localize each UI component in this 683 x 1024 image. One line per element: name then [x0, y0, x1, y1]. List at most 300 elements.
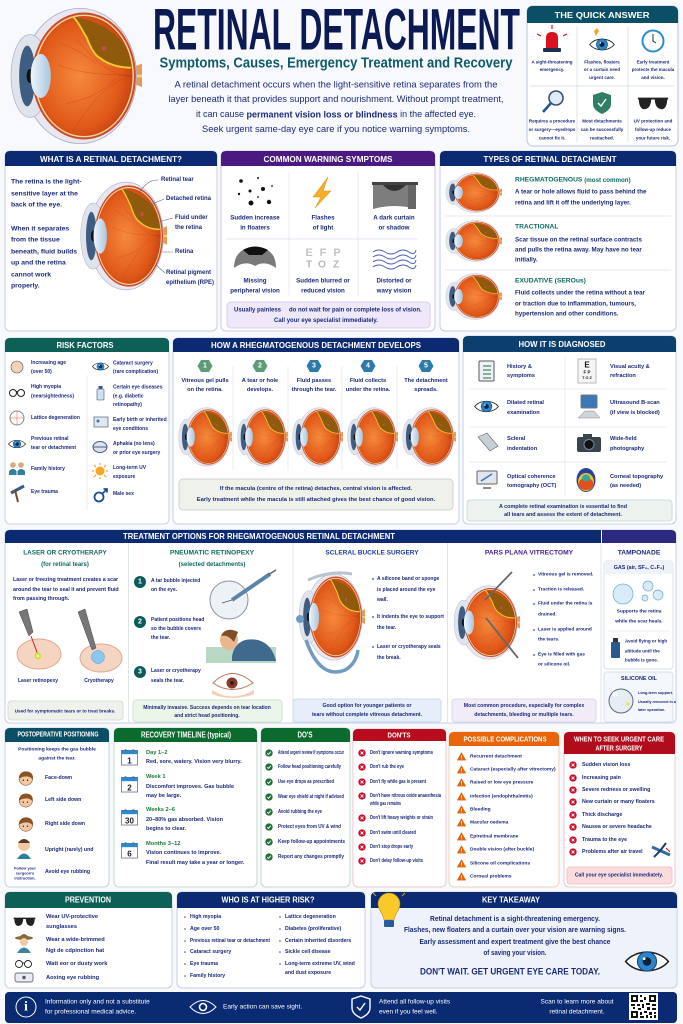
panel: possible complications [449, 732, 559, 887]
diagram: labelled eye: the retina [175, 225, 203, 231]
icon: aeroplane [652, 843, 670, 857]
treatment: pneumatic retinopexy: Patient positions head [151, 617, 204, 623]
treatment: pneumatic retinopexy: 3 [138, 668, 142, 676]
text: risk factors left: Lattice degeneration [31, 415, 80, 421]
step 4: Fluid collects [350, 378, 386, 384]
step 1: on the retina. [187, 387, 223, 393]
icon: siren [537, 25, 567, 52]
text: higher risk list: Sickle cell disease [285, 949, 331, 955]
treatment: scleral buckle surgery: is placed around the eye [377, 587, 436, 593]
step 1 [179, 360, 232, 466]
callout: call specialist: Call your eye specialist immediately. [575, 872, 664, 878]
text: quick answer top row: protects the macula [632, 67, 675, 72]
text: tractional: Scar tissue on the retinal surface contracts [515, 236, 642, 244]
callout: macula: Early treatment while the macula is still attached gives the best chance of good vision. [197, 497, 436, 503]
callout: laser note [8, 701, 123, 720]
treatment: laser or cryotherapy: Cryotherapy [84, 678, 114, 684]
gas box: GAS (air, SF₆, C₃F₈) [614, 565, 664, 571]
treatment: pars plana vitrectomy [452, 550, 596, 722]
treatment: scleral buckle surgery: SCLERAL BUCKLE SURGERY [325, 550, 419, 556]
text: do's list: Use eye drops as prescribed [278, 779, 334, 785]
text: disclaimer: for professional medical advice. [45, 1008, 136, 1016]
panel: prevention: PREVENTION [65, 896, 111, 904]
bullets [184, 916, 281, 977]
step 4: under the retina. [346, 387, 391, 393]
text: complications list: Macular oedema [470, 820, 509, 826]
treatment: pneumatic retinopexy: the tear. [151, 635, 171, 641]
treatment: scleral buckle surgery: the tear. [377, 625, 397, 631]
callout: buckle note: Good option for younger patients or [322, 703, 412, 709]
panel: recovery timeline: RECOVERY TIMELINE (typical) [141, 730, 231, 740]
item: wide-field photography [577, 434, 645, 452]
text: don'ts list: while gas remains [369, 801, 401, 807]
icon: shield check [593, 92, 611, 114]
text: symptoms row one: Sudden increase [230, 214, 280, 222]
text: complications list: Epiretinal membrane [470, 834, 519, 840]
icon: rhegmatogenous eye [446, 172, 502, 213]
text: risk factors right: Aphakia (no lens) [113, 441, 155, 447]
step 2: develops. [247, 387, 274, 393]
item: visual acuity: E [584, 360, 590, 370]
diagram: labelled eye: Retinal pigment [166, 270, 211, 276]
treatment: pneumatic retinopexy: 1 [138, 578, 142, 586]
text: risk factors right: eye conditions [113, 426, 148, 432]
stage: weeks 2-6: 30 [125, 816, 134, 826]
text: complications list: Silicone oil complications [470, 860, 530, 866]
icon: patient face down [206, 630, 276, 663]
text: quick answer bottom row [529, 118, 673, 140]
stage: months 3-12: 6 [127, 850, 132, 858]
text: positioning intro: against the tear. [38, 756, 76, 762]
text: risk factors right: (rare complication) [113, 369, 158, 375]
treatment: tamponade: TAMPONADE [618, 550, 661, 556]
treatment: pars plana vitrectomy: Vitreous gel is removed. [538, 572, 593, 578]
icon: treated eye [212, 674, 254, 698]
panel: who is at higher risk: WHO IS AT HIGHER RISK? [222, 896, 315, 904]
item: scleral indentation [478, 433, 538, 452]
treatment: pars plana vitrectomy: drained. [538, 612, 557, 618]
panel: what is a retinal detachment [5, 151, 217, 331]
step 2 [238, 360, 288, 466]
step 2: 2 [258, 362, 262, 370]
text: don'ts list: Don't rub the eye [370, 764, 404, 770]
text: quick answer bottom row: reattached. [590, 136, 614, 140]
text: higher risk list: Lattice degeneration [285, 914, 336, 920]
stage: week 1: 2 [127, 784, 132, 792]
treatment: scleral buckle surgery: the break. [377, 655, 401, 661]
panel: when to seek urgent care: WHEN TO SEEK URGENT CARE [574, 734, 664, 744]
treatment: tamponade [604, 550, 677, 722]
gas box: bubble is gone. [625, 658, 658, 662]
text: higher risk list: Previous retinal tear or detachment [190, 938, 270, 944]
text: rhegmatogenous: retina and lift it off the underlying layer. [515, 200, 631, 206]
panel: when to seek urgent care [564, 732, 675, 887]
text: symptoms row two: reduced vision [301, 288, 345, 294]
item: dilated retinal examination: examination [507, 410, 540, 416]
text: don'ts list: Don't fly while gas is present [370, 779, 426, 785]
text: takeaway message [404, 915, 626, 957]
text: complications list: Double vision (after buckle) [470, 846, 535, 852]
icons: risk factors left [8, 361, 26, 502]
text: exudative [515, 278, 646, 318]
introduction paragraph: layer beneath it that provides support and nourishment. Without prompt treatment, [168, 94, 504, 105]
item: corneal topography [576, 468, 664, 492]
treatment: pars plana vitrectomy: or silicone oil. [538, 662, 570, 668]
text: quick answer top row [531, 60, 675, 80]
diagram: labelled eye: Retina [175, 249, 194, 255]
icon: eye [626, 952, 668, 971]
panel: how it is diagnosed [463, 336, 676, 524]
text: surgeon instruction: Follow your [14, 866, 36, 870]
text: higher risk list: Age over 50 [190, 926, 220, 932]
icon: eye with instruments [454, 572, 520, 659]
icon: syringe and eyeball [210, 570, 276, 619]
text: quick answer bottom row: follow-up reduce [635, 127, 671, 132]
panel: how it is diagnosed: HOW IT IS DIAGNOSED [518, 339, 606, 349]
panel: what is a retinal detachment: WHAT IS A RETINAL DETACHMENT? [40, 154, 182, 164]
panel: do's: DO'S [298, 730, 312, 740]
text: exudative: or traction due to inflammation, tumours, [515, 300, 636, 308]
text: risk factors left: Family history [31, 466, 65, 472]
text: urgent list: Severe redness or swelling [582, 787, 650, 793]
text: risk factors right: exposure [113, 474, 135, 480]
item: visual acuity: Visual acuity & [610, 364, 650, 370]
text: definition: up and the retina [11, 260, 66, 266]
icon: lightning flash [313, 177, 331, 208]
text: symptoms row two: peripheral vision [230, 288, 280, 294]
text: definition: cannot work [11, 272, 51, 278]
text: prevention list: Ngt de cdpinction hat [46, 948, 104, 954]
text: exudative: hypertension and other conditions. [515, 310, 619, 318]
icon: sunglasses [638, 99, 668, 109]
treatment: scleral buckle surgery: Laser or cryotherapy seals [377, 644, 441, 650]
text: urgent list: Sudden vision loss [582, 762, 630, 768]
text: takeaway message: Flashes, new floaters and a curtain over your vision are warning signs. [404, 926, 626, 934]
callout: vitrectomy note: Most common procedure, especially for complex [464, 703, 584, 709]
text: tractional: initially. [515, 256, 538, 264]
panel: common warning symptoms: COMMON WARNING SYMPTOMS [264, 154, 393, 164]
text: complications list: Infection (endophthalmitis) [470, 794, 533, 800]
text: positions: Face-down [45, 775, 72, 781]
text: risk factors left: tear or detachment [31, 445, 76, 451]
item: OCT [477, 471, 557, 489]
treatment: pars plana vitrectomy: Eye is filled with gas [538, 652, 585, 658]
step 3 [292, 360, 343, 466]
text: higher risk list: Long-term extreme UV, wind [285, 961, 355, 967]
gas box [604, 561, 673, 669]
text: definition: back of the eye. [11, 202, 62, 208]
text: higher risk list: Family history [190, 973, 225, 979]
callout: pneumatic note: Minimally invasive. Success depends on tear location [143, 705, 271, 711]
step 3: through the tear. [292, 387, 337, 393]
callout: call specialist [567, 867, 672, 884]
icon: blurred letters: F [320, 247, 327, 259]
item: scleral indentation: Scleral [507, 436, 526, 442]
text: do's list: Keep follow-up appointments [278, 839, 345, 845]
text: takeaway message: of saving your vision. [484, 949, 547, 957]
icon: eye outline [190, 1000, 216, 1014]
item: OCT: tomography (OCT) [507, 483, 557, 489]
text: risk factors right: Cataract surgery [113, 360, 153, 366]
text: urgent list: Nausea or severe headache [582, 824, 652, 830]
text: higher risk list [190, 914, 355, 979]
text: risk factors left: High myopia [31, 384, 61, 390]
text: risk factors right: (e.g. diabetic [113, 394, 144, 400]
item: wide-field photography: photography [610, 446, 645, 452]
text: quick answer top row: Flashes, floaters [584, 60, 620, 64]
panel: recovery timeline [114, 728, 257, 887]
diagram: labelled eye [81, 177, 214, 290]
silicone oil box [604, 672, 677, 722]
icon: info: i [24, 1000, 28, 1014]
text: complications list: Cataract (especially after vitrectomy) [470, 766, 556, 772]
text: do's list: Follow head positioning carefully [278, 764, 341, 770]
panel: common warning symptoms [221, 151, 435, 331]
text: definition: from the tissue [11, 236, 60, 244]
text: follow-up: Attend all follow-up visits [379, 998, 451, 1006]
text: risk factors right: Early birth or inherited [113, 417, 167, 423]
text: risk factors right: Male sex [113, 491, 134, 497]
callout: complete examination: A complete retinal examination is essential to find [499, 504, 627, 510]
item: corneal topography: Corneal topography [610, 474, 664, 480]
silicone oil box: later operation. [638, 708, 665, 712]
text: higher risk list: Cataract surgery [190, 949, 231, 955]
item: history and symptoms: symptoms [507, 373, 535, 379]
callout: usually painless: Usually painless [234, 308, 282, 314]
panel: do's [261, 728, 350, 887]
text: takeaway message: Early assessment and expert treatment give the best chance [420, 938, 611, 946]
text: risk factors right: Long-term UV [113, 465, 147, 471]
icon: dark curtain [372, 182, 418, 209]
item: history and symptoms: History & [507, 364, 532, 370]
stage: day 1-2: Red, sore, watery. Vision very blurry. [146, 759, 242, 765]
silicone oil box: Long-term support. [638, 691, 673, 695]
QR code [629, 993, 658, 1020]
text: do's list: Attend urgent review if symptoms occur [278, 750, 344, 756]
text: quick answer bottom row: or surgery—eyedrops [529, 127, 576, 132]
panel: types of retinal detachment: TYPES OF RETINAL DETACHMENT [484, 154, 617, 164]
panel: who is at higher risk [177, 892, 365, 988]
text: complications list: Bleeding [470, 806, 491, 812]
text: scan prompt: retinal detachment. [549, 1008, 605, 1016]
text: positioning intro [18, 746, 96, 762]
panel: don'ts: DON'TS [388, 730, 411, 740]
icon: blurred letters [305, 247, 341, 270]
icon: cryotherapy [78, 609, 122, 672]
item: ultrasound [578, 395, 660, 418]
item: visual acuity: F P [583, 370, 591, 374]
text: follow-up [379, 998, 451, 1016]
text: definition: When it separates [11, 226, 69, 232]
text: definition: The retina is the light- [11, 178, 82, 186]
text: do's list: Avoid rubbing the eye [278, 809, 322, 815]
text: urgent list: Thick discharge [582, 812, 622, 818]
icon: eye with flash [590, 28, 614, 50]
text: higher risk list: Eye trauma [190, 961, 218, 967]
text: urgent list: New curtain or many floaters [582, 799, 655, 805]
icon: light bulb [373, 893, 405, 927]
diagram: labelled eye: Fluid under [175, 215, 208, 221]
treatment: scleral buckle surgery: A silicone band or sponge [377, 576, 440, 582]
introduction paragraph: Seek urgent same-day eye care if you notice warning symptoms. [202, 124, 470, 135]
treatment: pneumatic retinopexy: 2 [138, 618, 142, 626]
callout: vitrectomy note [452, 699, 596, 722]
step 1: Vitreous gel pulls [181, 378, 229, 384]
treatment: pneumatic retinopexy: Laser or cryotherapy [151, 668, 201, 674]
treatment: pneumatic retinopexy [133, 550, 282, 722]
step 3: 3 [312, 362, 316, 370]
text: quick answer top row: urgent care. [589, 75, 615, 80]
treatment: pneumatic retinopexy: seals the tear. [151, 678, 185, 684]
step 5: The detachment [404, 378, 448, 384]
text: quick answer bottom row: UV protection and [634, 118, 673, 124]
text: symptoms row two: Missing [243, 278, 267, 284]
text: rhegmatogenous: RHEGMATOGENOUS (most common) [515, 176, 631, 184]
stage: day 1-2: 1 [127, 756, 132, 766]
icon: laser retinopexy [17, 609, 61, 669]
icons: warning triangles [457, 753, 466, 880]
treatment: laser or cryotherapy: (for retinal tears) [41, 562, 89, 568]
introduction paragraph: A retinal detachment occurs when the light-sensitive retina separates from the [174, 80, 498, 90]
text: quick answer bottom row: your future risk. [636, 136, 670, 140]
panel: key takeaway: KEY TAKEAWAY [482, 896, 541, 904]
text: exudative: EXUDATIVE (SEROus) [515, 278, 586, 284]
text: quick answer top row: Early treatment [637, 60, 670, 64]
gas box: Supports the retina [617, 608, 662, 614]
panel: treatment options: TREATMENT OPTIONS FOR RHEGMATOGENOUS RETINAL DETACHMENT [123, 532, 395, 541]
text: prevention list: Wear a wide-brimmed [46, 937, 105, 943]
text: follow-up: even if you feel well. [379, 1008, 438, 1016]
item: ultrasound: Ultrasound B-scan [610, 400, 660, 406]
text: quick answer bottom row: Requires a procedure [529, 118, 576, 124]
icon: blurred letters: Z [333, 260, 339, 270]
text: do's list: Report any changes promptly [278, 854, 344, 860]
text: definition: properly. [11, 282, 40, 290]
treatment: laser or cryotherapy [8, 550, 123, 720]
callout: vitrectomy note: detachments, bleeding or multiple tears. [474, 712, 574, 718]
stage: day 1-2 [121, 749, 242, 766]
text: complications list: Recurrent detachment [470, 754, 522, 760]
text: don'ts list: Don't stop drops early [370, 844, 413, 850]
callout: buckle note: tears without complete vitreous detachment. [312, 712, 423, 718]
text: quick answer top row: and vision. [641, 75, 665, 80]
stage: weeks 2-6: Weeks 2–6 [146, 807, 175, 813]
text: complications list [470, 754, 556, 880]
diagram: labelled eye: epithelium (RPE) [166, 280, 214, 286]
text: prevention list: sunglasses [46, 924, 77, 930]
text: higher risk list: Diabetes (proliferative) [285, 926, 341, 932]
treatment: pneumatic retinopexy: A tar bubble injected [151, 578, 200, 584]
text: symptoms row two: wavy vision [376, 288, 412, 294]
icon: blurred letters: E [305, 247, 313, 259]
item: history and symptoms [479, 361, 535, 381]
text: symptoms row one [230, 214, 415, 232]
text: symptoms row two [230, 278, 412, 294]
icon: wavy lines [373, 250, 416, 269]
text: symptoms row one: of light [313, 224, 333, 232]
treatment: pneumatic retinopexy: so the bubble covers [151, 626, 201, 632]
callout: laser note: Used for symptomatic tears or to treat breaks. [15, 708, 115, 714]
item: scleral indentation: indentation [507, 446, 538, 452]
panel: how a rhegmatogenous detachment develops [173, 338, 459, 524]
item: ultrasound: (if view is blocked) [610, 410, 660, 416]
stage: weeks 2-6: begins to clear. [146, 826, 187, 832]
treatment: pars plana vitrectomy: Laser is applied around [538, 626, 592, 632]
stage: months 3-12: Vision continues to improve. [146, 850, 222, 856]
icon: eye with buckle [296, 573, 365, 672]
text: quick answer top row: or a curtain need [584, 67, 620, 72]
text: positions [45, 775, 93, 875]
subtitle: Symptoms, Causes, Emergency Treatment and Recovery [160, 54, 513, 72]
text: urgent list: Problems after air travel [582, 849, 643, 855]
header illustration: eye cross-section [11, 8, 142, 144]
treatment: pneumatic retinopexy: on the eye. [151, 587, 178, 593]
callout: pneumatic note [133, 700, 282, 722]
text: positioning intro: Positioning keeps the gas bubble [18, 746, 96, 752]
text: risk factors left [31, 360, 80, 495]
text: risk factors right: or prior eye surgery [113, 450, 160, 456]
item: wide-field photography: Wide-field [610, 436, 637, 442]
text: symptoms row one: Flashes [311, 214, 335, 222]
panel: the quick answer [527, 6, 678, 146]
icon: tractional eye [446, 220, 502, 262]
text: risk factors right: retinopathy) [113, 402, 142, 408]
text: risk factors right: Certain eye diseases [113, 384, 163, 390]
step 1: 1 [203, 362, 207, 370]
treatment: scleral buckle surgery: It indents the eye to support [377, 614, 444, 620]
text: tractional: and pulls the retina away. May have no tear [515, 246, 642, 254]
text: prevention list [46, 914, 108, 981]
icon: exudative eye [446, 273, 502, 320]
treatment: scleral buckle surgery: wall. [376, 597, 388, 603]
panel: postoperative positioning [5, 728, 109, 887]
panel: the quick answer: THE QUICK ANSWER [554, 10, 650, 20]
icons: crosses [358, 749, 366, 865]
panel: possible complications: POSSIBLE COMPLICATIONS [464, 734, 547, 744]
text: scan prompt [540, 998, 614, 1016]
icon: info [16, 997, 36, 1017]
text: risk factors left: Eye trauma [31, 489, 58, 495]
text: exudative: Fluid collects under the retina without a tear [515, 290, 646, 296]
text: complications list: Raised or low eye pressure [470, 780, 534, 786]
callout: pneumatic note: and strict head positioning. [174, 713, 240, 719]
diagram: labelled eye: Retinal tear [161, 177, 194, 183]
text: risk factors right [113, 360, 167, 497]
text: symptoms row two: Sudden blurred or [296, 278, 350, 284]
callout: usually painless [227, 302, 430, 328]
text: scan prompt: Scan to learn more about [540, 998, 614, 1006]
text: rhegmatogenous: A tear or hole allows fluid to pass behind the [515, 188, 647, 196]
silicone oil box: Usually removed in a [638, 700, 677, 704]
icons: checks [265, 749, 273, 861]
panel: how a rhegmatogenous detachment develops: HOW A RHEGMATOGENOUS DETACHMENT DEVELOPS [211, 340, 421, 350]
callout: macula [179, 479, 453, 510]
icon: blurred letters: O [318, 260, 326, 270]
step 5: 5 [424, 362, 428, 370]
text: urgent list: Increasing pain [582, 775, 621, 781]
text: do's list: Protect eyes from UV & wind [278, 824, 341, 830]
text: quick answer top row: emergency. [540, 67, 564, 72]
text: disclaimer [45, 998, 150, 1016]
stage: week 1 [121, 774, 234, 799]
text: quick answer top row: A sight-threatening [531, 60, 573, 64]
text: higher risk list: and dust exposure [285, 970, 331, 976]
icons: risk factors right [92, 363, 109, 502]
item: dilated retinal examination [475, 400, 544, 416]
icon: floaters [238, 177, 273, 206]
icons: urgent signs [569, 761, 577, 856]
text: risk factors left: Previous retinal [31, 436, 69, 442]
